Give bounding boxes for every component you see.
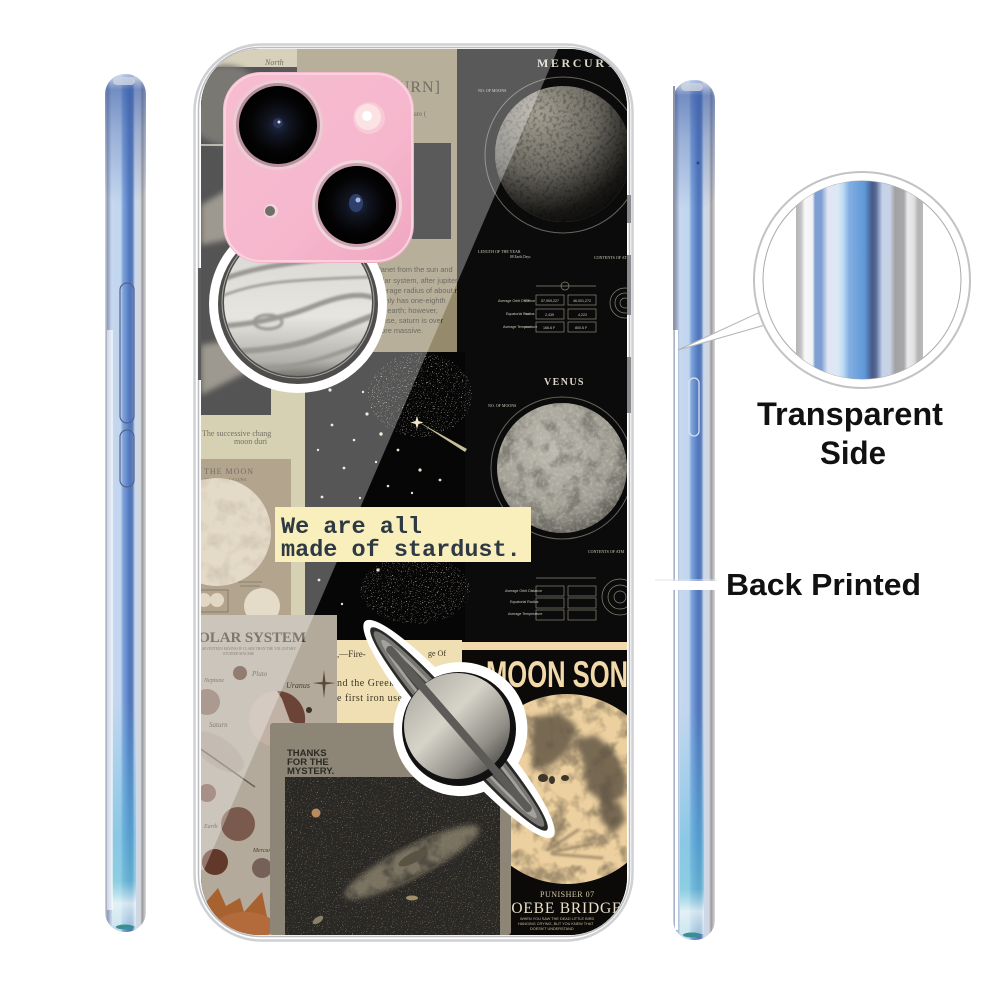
panel: Mercury chart: LENGTH OF THE YEAR: [478, 249, 521, 254]
panel: Mercury chart: 4,222: [578, 313, 587, 317]
panel: cream strip and moon chart: [201, 388, 305, 615]
magnified stripes: [796, 170, 923, 390]
panel: Venus chart: [488, 377, 638, 620]
panel: fire and iron text page: ge Of: [428, 649, 446, 658]
panel: Saturn article page: average radius of about ro: [375, 286, 461, 295]
shooting star: [410, 416, 467, 452]
panel: Saturn article page: the earth; however,: [375, 306, 438, 315]
panel: Mercury chart: 800.6 F: [575, 326, 588, 330]
panel: Thanks for the mystery poster: FOR THE: [287, 757, 329, 768]
panel: Mercury chart: 166.6 F: [543, 326, 556, 330]
lens: ultra wide camera: [312, 160, 402, 250]
pointer: [678, 313, 765, 350]
panel: Moon Song poster: [462, 640, 627, 935]
panel: Mercury chart: MERCURY: [537, 56, 617, 70]
panel: Moon Song poster: PUNISHER 07: [540, 890, 595, 899]
panel: Solar System chart: Pluto: [251, 670, 268, 678]
moon maria: [532, 713, 627, 858]
panel: top-left page scraps: North: [264, 58, 284, 67]
panel: Thanks for the mystery poster: THANKS: [287, 748, 327, 759]
panel: Mercury chart: Average Orbit Distance: [498, 299, 535, 303]
panel: Solar System chart: Saturn: [209, 721, 228, 729]
leader line: back printed: [655, 580, 717, 590]
flash: [353, 102, 385, 134]
panel: top-left page scraps: [201, 49, 297, 396]
caption strip: stardust quote: [275, 507, 531, 564]
phone case outline: [194, 44, 632, 940]
panel: Moon Song poster: PHOEBE BRIDGERS: [490, 900, 643, 917]
label: Transparent Side: Side: [820, 435, 886, 471]
panel: starfield: [316, 353, 472, 624]
panel: Solar System chart: Neptune: [203, 678, 224, 684]
caption strip: stardust quote: We are all: [281, 514, 422, 541]
panel: Mercury chart: Equatorial Radius: [506, 312, 535, 316]
panel: Moon Song poster: DOESN'T UNDERSTAND: [530, 927, 574, 931]
panel: Solar System chart: SOLAR SYSTEM: [190, 630, 306, 646]
caption strip: stardust quote: made of stardust.: [281, 537, 521, 564]
sticker: Jupiter: [209, 246, 387, 393]
panel: Mercury chart: 57,909,227: [541, 299, 559, 303]
panel: Venus chart: Average Orbit Distance: [505, 589, 542, 593]
panel: Saturn article page: and agriculture (: [380, 110, 427, 118]
panel: fire and iron text page: nd the Greeks: [337, 678, 399, 689]
panel: cream strip and moon chart: The successive chang: [202, 429, 271, 438]
panel: Solar System chart: [201, 615, 337, 935]
panel: fire and iron text page: [330, 640, 465, 723]
panel: Solar System chart: Earth: [203, 824, 218, 830]
panel: Moon Song poster: HANGING CRYING, BUT YOU KNEW THAT: [518, 922, 594, 926]
data table: [524, 282, 640, 332]
panel: Moon Song poster: WHEN YOU SAW THE DEAD LITTLE BIRD: [520, 917, 594, 921]
panel: Venus chart: VENUS: [544, 377, 585, 388]
panel: Saturn article page: [297, 49, 461, 352]
panel: Venus chart: CONTENTS OF ATM: [588, 549, 625, 554]
panel: Thanks for the mystery poster: MYSTERY.: [287, 766, 334, 777]
panel: Venus chart: NO. OF MOONS: [488, 403, 516, 408]
panel: Saturn article page: [SATURN]: [360, 79, 441, 96]
panel: Solar System chart: Mercury: [252, 848, 274, 854]
label: Transparent Side: Transparent: [757, 396, 943, 432]
panel: Mercury chart: 88 Earth Days: [510, 255, 531, 259]
panel: Thanks for the mystery poster: [270, 723, 511, 935]
lens: main camera: [233, 80, 323, 170]
side button: [689, 378, 699, 436]
panel: Saturn article page: sense, saturn is over: [375, 316, 444, 325]
panel: Saturn article page: planet from the sun and: [375, 265, 453, 274]
panel: Solar System chart: STUDIED SINCERE: [223, 652, 255, 656]
panel: fire and iron text page: e first iron used: [337, 693, 408, 704]
panel: Venus chart: Average Temperature: [508, 612, 542, 616]
panel: cream strip and moon chart: THE MOON AS A LUNA: [204, 477, 247, 482]
sticker: Saturn: [315, 576, 604, 880]
left side view of case: [105, 74, 146, 932]
right side view of case: [673, 80, 715, 940]
panel: Mercury chart: Average Temperature: [503, 325, 537, 329]
microphone: [264, 204, 278, 218]
panel: Mercury chart: 46,001,272: [573, 299, 591, 303]
panel: Saturn article page: solar system, after jupiter: [375, 276, 458, 285]
panel: Saturn article page: more massive.: [375, 326, 423, 335]
panel: Solar System chart: SEVENTEEN MOONS OF CLAIM THAN THE VOLUNTARY: [202, 647, 296, 651]
panel: fire and iron text page: ,—Fire-: [337, 649, 366, 659]
panel: Mercury chart: CONTENTS OF ATM: [594, 255, 631, 260]
back print artwork: [201, 49, 627, 935]
label: Back Printed: Back Printed: [726, 567, 921, 602]
panel: cream strip and moon chart: moon duri: [234, 437, 268, 446]
panel: Saturn article page: It only has one-eighth: [375, 296, 446, 305]
label: Transparent Side: [757, 396, 943, 471]
callout: transparent side magnifier: [678, 170, 970, 390]
panel: Solar System chart: Uranus: [286, 681, 310, 690]
gloss reflection: [201, 49, 558, 870]
panel: Mercury chart: 2,439: [545, 313, 554, 317]
panel: Mercury chart: [457, 49, 627, 332]
panel: Mercury chart: NO. OF MOONS: [478, 88, 506, 93]
camera module: [223, 72, 414, 263]
side buttons: [120, 283, 134, 487]
sparkle star: [312, 670, 336, 698]
panel: cream strip and moon chart: THE MOON: [204, 467, 254, 476]
product infographic: [105, 43, 971, 942]
panel: Venus chart: Equatorial Radius: [510, 600, 539, 604]
panel: Moon Song poster: MOON SONG: [486, 654, 648, 695]
